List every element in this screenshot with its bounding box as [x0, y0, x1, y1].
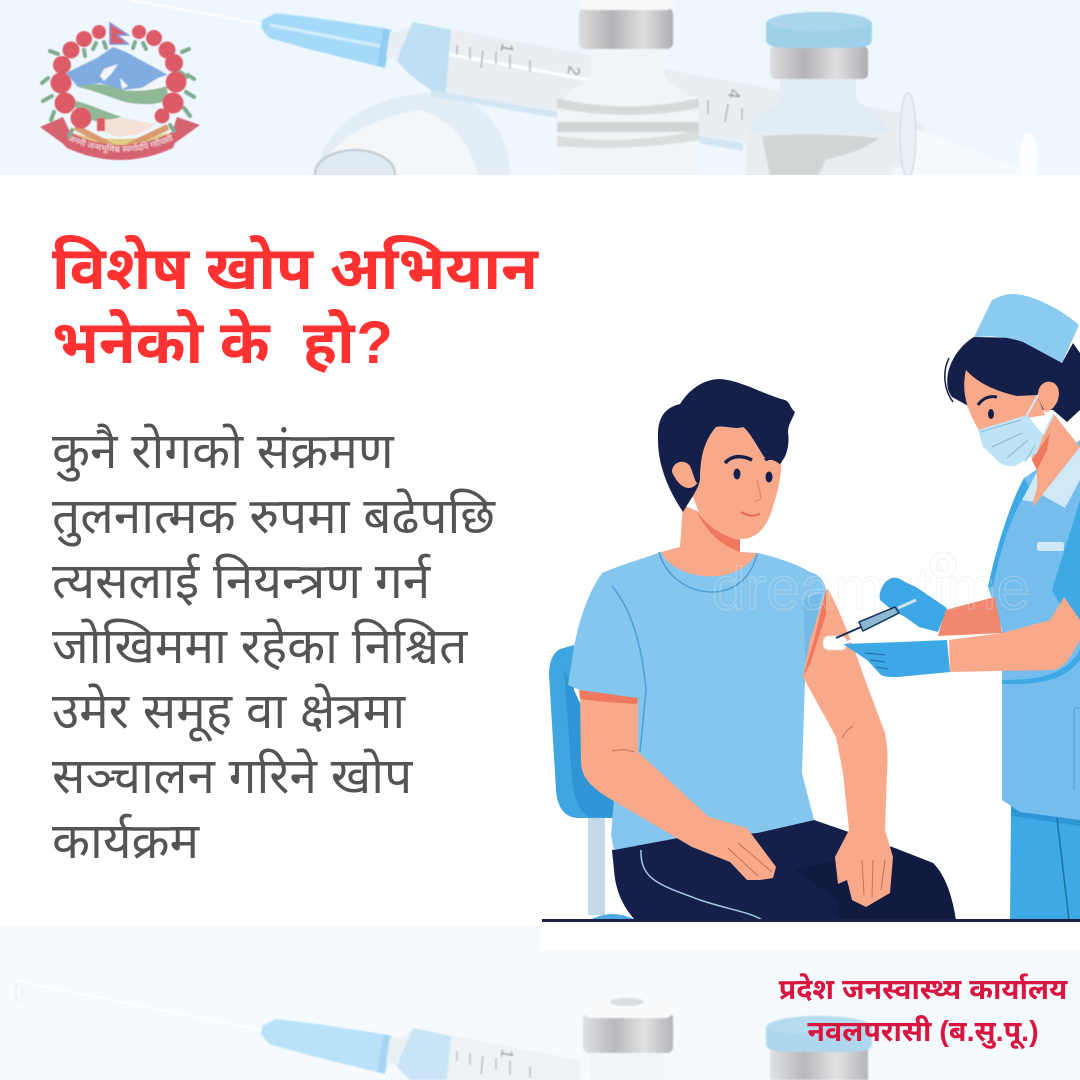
body text: त्यसलाई नियन्त्रण गर्न	[52, 554, 430, 609]
footer: office name	[778, 973, 1068, 1050]
man ear	[672, 462, 698, 488]
flag	[110, 23, 128, 44]
wreath leaves	[42, 42, 194, 136]
body text: तुलनात्मक रुपमा बढेपछि	[52, 489, 495, 544]
nurse trousers	[1010, 805, 1080, 920]
body text: कुनै रोगको संक्रमण	[52, 424, 394, 479]
laurel base	[72, 133, 168, 153]
nurse upper glove	[880, 578, 947, 632]
illustration: vaccination scene	[542, 294, 1080, 922]
nurse collar	[1022, 447, 1080, 508]
watermark: dreamstime	[712, 555, 1030, 622]
emblem of Nepal	[39, 21, 200, 161]
syringe and vials photo: 2	[564, 64, 584, 77]
body text: उमेर समूह वा क्षेत्रमा	[52, 684, 405, 739]
body text: जोखिममा रहेका निश्चित	[52, 619, 467, 674]
nurse face	[964, 370, 1045, 432]
chair	[549, 645, 636, 920]
mountain	[66, 47, 170, 90]
syringe and vials photo repeat: 1	[497, 1048, 517, 1060]
nurse cap	[974, 294, 1079, 363]
syringe and vials photo	[130, 0, 1038, 175]
nurse head	[945, 294, 1080, 508]
man left arm	[579, 690, 776, 880]
man neck	[661, 505, 757, 576]
lying vial	[315, 93, 510, 175]
nurse neck	[1027, 413, 1080, 507]
white glove gap	[843, 623, 945, 643]
ground line	[542, 919, 1080, 922]
man right arm	[803, 588, 893, 907]
heading: भनेको के हो ?	[52, 309, 393, 376]
hub	[377, 28, 392, 68]
body text: कार्यक्रम	[52, 814, 199, 869]
syringe and vials photo: 4	[724, 88, 744, 100]
syringe and vials photo repeat	[16, 981, 872, 1080]
nurse lower glove	[843, 640, 950, 677]
nurse mask	[978, 415, 1043, 466]
emblem of Nepal: जननी जन्मभूमिश्च स्वर्गादपि गरीयसी	[68, 133, 174, 154]
man brows and eyes	[725, 457, 781, 463]
green hills	[78, 84, 168, 104]
footer: office name: नवलपरासी (ब.सु.पू.)	[807, 1016, 1039, 1048]
vial 2	[780, 79, 864, 108]
body text	[52, 424, 496, 869]
nurse arms	[938, 597, 1080, 684]
rhododendron wreath	[50, 25, 186, 128]
footer: office name: प्रदेश जनस्वास्थ्य कार्यालय	[779, 974, 1067, 1006]
syringe	[836, 600, 916, 638]
plunger	[914, 130, 924, 170]
barrel	[396, 22, 925, 170]
bandage	[823, 636, 847, 650]
ribbon with motto	[40, 117, 200, 160]
body text: सञ्चालन गरिने खोप	[52, 749, 412, 804]
nurse uniform	[988, 440, 1080, 820]
man hair	[658, 379, 795, 512]
nurse hair	[947, 337, 1080, 422]
heading	[52, 234, 539, 376]
bottom background banner	[0, 926, 1080, 1080]
vial 1	[556, 78, 700, 144]
top background banner	[0, 0, 1080, 175]
syringe and vials photo: 1	[497, 42, 517, 54]
handshake	[100, 118, 155, 137]
man trousers	[612, 820, 956, 921]
man head	[658, 379, 795, 552]
heading: विशेष खोप अभियान	[52, 235, 538, 302]
nurse eye	[978, 397, 997, 405]
man shirt	[568, 552, 826, 850]
